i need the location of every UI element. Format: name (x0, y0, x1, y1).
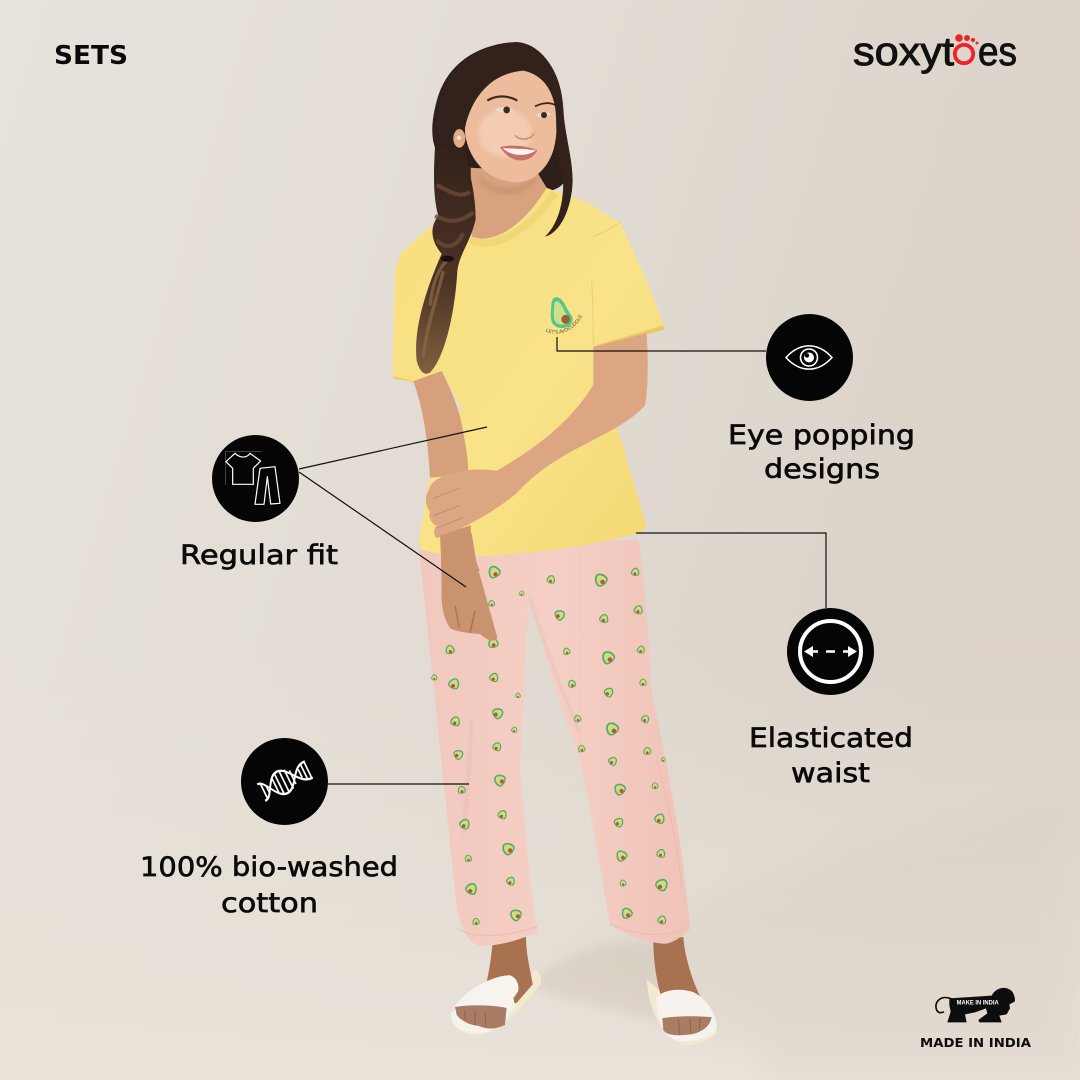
hair front and fringe (437, 43, 573, 237)
label: eye popping designs: designs (764, 454, 880, 485)
model: lower hand (441, 533, 497, 641)
label: eye popping designs (728, 420, 915, 485)
label: elasticated waist (749, 723, 913, 789)
avocado chest print: LET'S AVOCUDDLE (546, 314, 582, 334)
braid (416, 147, 476, 374)
logo: soxytoes (853, 30, 1017, 74)
callout line: eye popping designs (557, 337, 766, 351)
label: elasticated waist: Elasticated (749, 723, 913, 754)
label: bio-washed cotton (140, 852, 398, 919)
callout line: elasticated waist (636, 533, 826, 608)
label: eye popping designs: Eye popping (728, 420, 915, 451)
icon: DNA strand (241, 738, 328, 825)
logo: soxytoes: soxyt (853, 30, 954, 74)
model: upper body with head and t-shirt (352, 42, 664, 571)
icon: elastic waist arrows (787, 608, 874, 695)
icon: eye (766, 314, 853, 401)
model: lower body with pants and slippers (420, 540, 720, 1045)
t-shirt (393, 188, 664, 556)
floor shadow under the feet (533, 942, 720, 1037)
badge: Make in India lion: MADE IN INDIA (920, 1035, 1031, 1050)
avocado print on pants (431, 563, 671, 926)
face (465, 71, 557, 182)
callout lines: regular fit (299, 427, 487, 587)
pants (420, 540, 690, 946)
ear (453, 129, 465, 148)
right foot and slipper (647, 937, 717, 1045)
wrist (440, 525, 480, 571)
right arm and hand (426, 333, 648, 538)
callout line: bio-washed cotton (328, 783, 469, 785)
label: regular fit: Regular fit (180, 540, 338, 571)
left arm (413, 371, 468, 478)
logo: soxytoes: es (978, 30, 1017, 74)
neck (471, 168, 547, 239)
left foot and slipper (451, 937, 541, 1035)
label: elasticated waist: waist (791, 758, 870, 789)
label: bio-washed cotton: cotton (221, 888, 318, 919)
badge: Make in India lion (920, 988, 1031, 1050)
badge: Make in India lion: MAKE IN INDIA (957, 1000, 999, 1006)
icon: t-shirt and pants (212, 435, 299, 522)
label: bio-washed cotton: 100% bio-washed (140, 852, 398, 883)
hair back (432, 42, 567, 223)
avocado chest print (546, 297, 582, 334)
heading: SETS: SETS (54, 41, 128, 71)
